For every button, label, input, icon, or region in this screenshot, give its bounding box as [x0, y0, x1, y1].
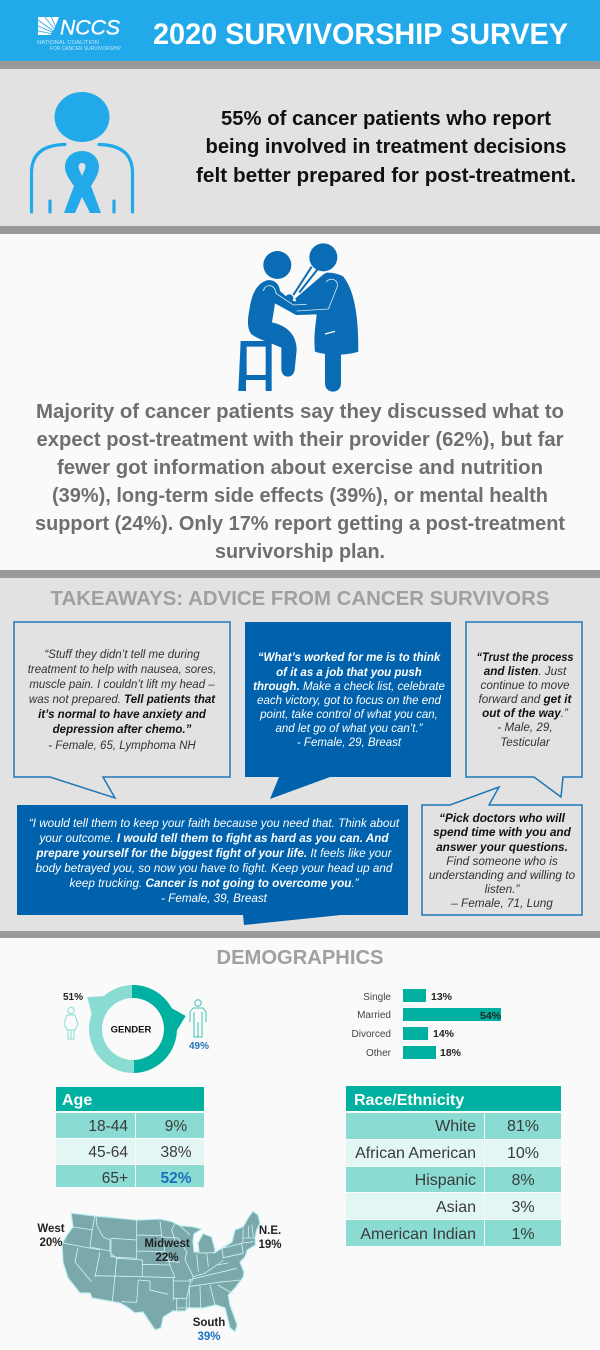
- paragraph: [35, 401, 565, 563]
- quote 5: answer your questions.: [436, 840, 568, 854]
- statistic text: felt better prepared for post-treatment.: [196, 165, 576, 187]
- age table: Age: [62, 1092, 92, 1109]
- label: west: [37, 1223, 65, 1249]
- quote 5: “Pick doctors who will: [439, 811, 566, 825]
- title: 2020 SURVIVORSHIP SURVEY: [153, 18, 568, 51]
- quote 4: prepare yourself for the biggest fight of your life. It feels like your: [35, 847, 393, 860]
- NCCS logo: FOR CANCER SURVIVORSHIP: [50, 46, 122, 52]
- paragraph: fewer got information about exercise and nutrition: [57, 457, 543, 479]
- panel: provider discussions: [35, 243, 565, 563]
- NCCS logo: [37, 16, 122, 52]
- label: west: 20%: [39, 1237, 63, 1249]
- race and ethnicity table: 8%: [511, 1172, 535, 1189]
- race and ethnicity table: Asian: [436, 1199, 476, 1216]
- takeaways heading: TAKEAWAYS: ADVICE FROM CANCER SURVIVORS: [50, 588, 550, 610]
- paragraph: (39%), long-term side effects (39%), or mental health: [52, 485, 548, 507]
- marital status bar chart: Other: [366, 1048, 392, 1059]
- label: northeast: [258, 1225, 282, 1251]
- panel: takeaways: [0, 578, 600, 931]
- statistic text: being involved in treatment decisions: [206, 136, 566, 158]
- statistic text: [196, 108, 576, 187]
- quote 4: - Female, 39, Breast: [161, 892, 268, 905]
- label: south: [193, 1317, 225, 1343]
- header banner: [0, 0, 600, 61]
- gender donut chart: [63, 985, 209, 1073]
- quote 4: your outcome. I would tell them to fight as hard as you can. And: [39, 832, 389, 845]
- paragraph: survivorship plan.: [215, 541, 385, 563]
- NCCS logo: NATIONAL COALITION: [37, 40, 99, 46]
- icon: man: [190, 1000, 206, 1037]
- NCCS logo: NCCS: [60, 16, 120, 40]
- paragraph: support (24%). Only 17% report getting a post-treatment: [35, 513, 565, 535]
- marital status bar chart: Divorced: [352, 1029, 391, 1040]
- marital status bar chart: 13%: [431, 991, 453, 1003]
- label: south: 39%: [197, 1331, 221, 1343]
- race and ethnicity table: Hispanic: [415, 1172, 476, 1189]
- quote 5: listen.”: [485, 882, 520, 896]
- marital status bar chart: 54%: [480, 1010, 502, 1022]
- marital status bar chart: 14%: [433, 1028, 455, 1040]
- quote 2: and let go of what you can’t.”: [275, 723, 424, 735]
- age table: 52%: [160, 1170, 192, 1187]
- label: gender: GENDER: [111, 1024, 151, 1036]
- marital status bar chart: Single: [363, 992, 391, 1003]
- label: midwest: 22%: [155, 1252, 179, 1264]
- quote 3: [466, 622, 582, 797]
- quote 2: each victory, got to focus on the end: [257, 695, 442, 707]
- map shape: [62, 1211, 260, 1332]
- quote 3: - Male, 29,: [497, 721, 553, 734]
- US regional map: [37, 1211, 282, 1343]
- race and ethnicity table: 1%: [511, 1226, 535, 1243]
- quote 1: was not prepared. Tell patients that: [29, 694, 216, 706]
- quote 5: understanding and willing to: [429, 868, 576, 882]
- quote 2: of it as a job that you push: [276, 667, 422, 679]
- panel: involvement statistic: [0, 69, 600, 226]
- quote 2: “What’s worked for me is to think: [258, 652, 441, 664]
- label: west: West: [37, 1223, 65, 1235]
- marital status bar chart: Married: [357, 1010, 391, 1021]
- quote 5: Find someone who is: [446, 854, 558, 868]
- paragraph: Majority of cancer patients say they discussed what to: [36, 401, 564, 423]
- statistic text: 55% of cancer patients who report: [221, 108, 551, 130]
- marital status bar chart: [352, 989, 502, 1059]
- icon: doctor examining patient: [238, 243, 358, 392]
- label: northeast: 19%: [258, 1239, 282, 1251]
- race and ethnicity table: Race/Ethnicity: [354, 1092, 464, 1109]
- quote 1: - Female, 65, Lymphoma NH: [48, 740, 196, 752]
- quote 5: – Female, 71, Lung: [450, 896, 553, 910]
- age table: 45-64: [88, 1144, 128, 1161]
- age table: 9%: [165, 1118, 187, 1135]
- age table: 65+: [102, 1170, 128, 1187]
- quote 2: - Female, 29, Breast: [297, 737, 402, 749]
- age table: 38%: [160, 1144, 192, 1161]
- paragraph: expect post-treatment with their provider (62%), but far: [36, 429, 564, 451]
- quote 3: and listen. Just: [484, 665, 567, 678]
- marital status bar chart: 18%: [440, 1047, 462, 1059]
- label: south: South: [193, 1317, 225, 1329]
- race and ethnicity table: African American: [355, 1145, 476, 1162]
- age table: 18-44: [88, 1118, 128, 1135]
- race and ethnicity table: [346, 1086, 561, 1246]
- quote 2: through. Make a check list, celebrate: [253, 681, 445, 693]
- race and ethnicity table: American Indian: [360, 1226, 476, 1243]
- race and ethnicity table: 10%: [507, 1145, 539, 1162]
- quote 5: spend time with you and: [433, 825, 572, 839]
- quote 3: continue to move: [480, 679, 570, 692]
- label: midwest: Midwest: [144, 1238, 190, 1250]
- quote 1: [14, 622, 230, 798]
- quote 1: depression after chemo.”: [53, 724, 192, 736]
- demographics heading: DEMOGRAPHICS: [216, 947, 384, 969]
- quote 3: out of the way.”: [482, 707, 569, 720]
- quote 4: “I would tell them to keep your faith because you need that. Think about: [29, 817, 400, 830]
- label: female 51%: 51%: [63, 992, 83, 1003]
- icon: woman: [64, 1007, 78, 1039]
- label: midwest: [144, 1238, 190, 1264]
- quote 4: keep trucking. Cancer is not going to overcome you.”: [69, 877, 360, 890]
- quote 1: it’s normal to have anxiety and: [38, 709, 207, 721]
- quote 1: treatment to help with nausea, sores,: [28, 664, 216, 676]
- quote 4: [17, 805, 408, 925]
- quote 5: [422, 787, 582, 915]
- race and ethnicity table: 3%: [511, 1199, 535, 1216]
- quote 1: “Stuff they didn’t tell me during: [44, 649, 200, 661]
- icon: person with ribbon: [32, 92, 132, 213]
- race and ethnicity table: 81%: [507, 1118, 539, 1135]
- quote 3: “Trust the process: [476, 651, 574, 664]
- quote 3: Testicular: [500, 736, 551, 749]
- label: male 49%: 49%: [189, 1041, 209, 1052]
- quote 1: muscle pain. I couldn’t lift my head –: [29, 679, 215, 691]
- age table: [56, 1087, 204, 1187]
- quote 4: body betrayed you, so now you have to fight. Keep your head up and: [36, 862, 393, 875]
- quote 2: point, take control of what you can,: [259, 709, 438, 721]
- quote 2: [245, 622, 451, 799]
- label: northeast: N.E.: [259, 1225, 281, 1237]
- race and ethnicity table: White: [435, 1118, 476, 1135]
- quote 3: forward and get it: [479, 693, 573, 706]
